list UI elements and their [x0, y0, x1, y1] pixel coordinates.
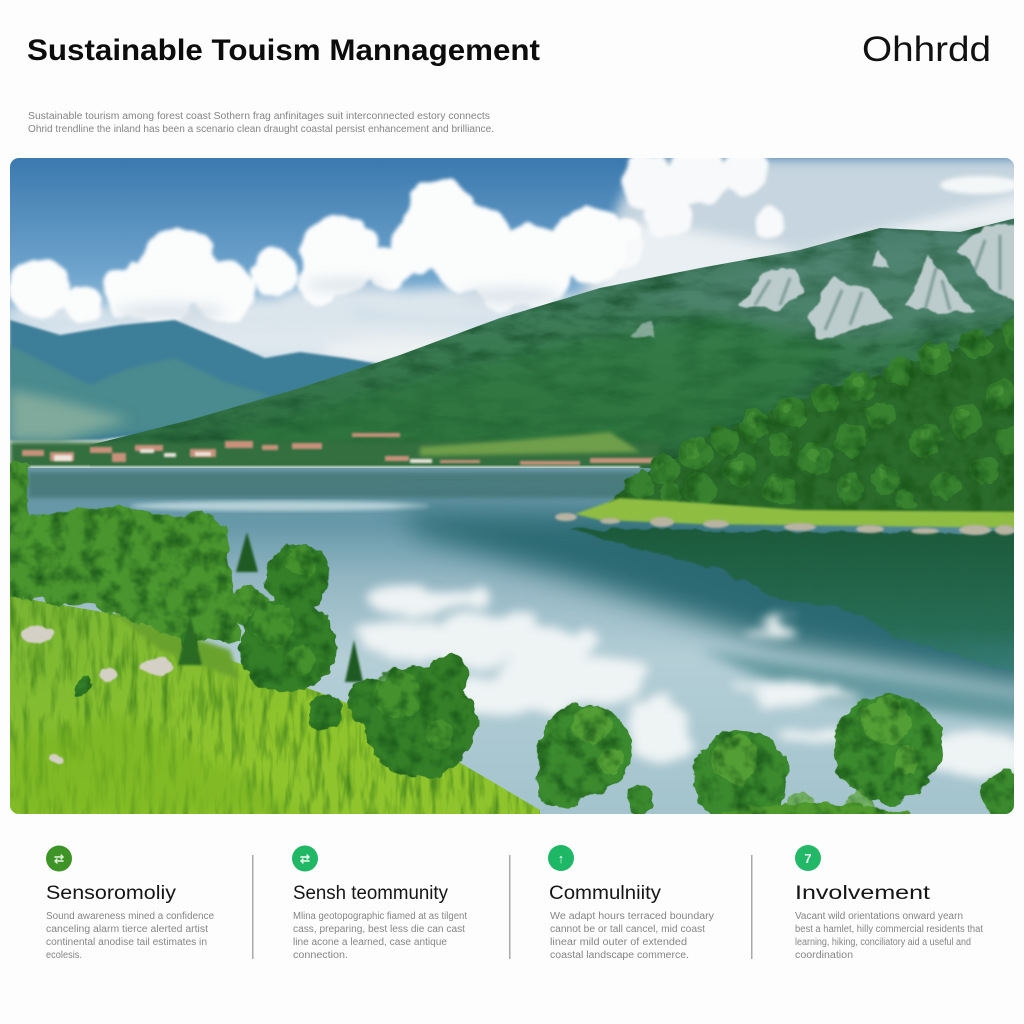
brand name: Ohhrdd — [862, 30, 991, 69]
forested headland — [605, 315, 1024, 515]
text block 4: learning, hiking, conciliatory aid a useful and — [795, 937, 971, 948]
icon: green badge 2 — [292, 846, 318, 872]
panel: feature 2 — [292, 846, 467, 961]
clouds — [0, 146, 1024, 366]
heading 2: Sensh teommunity — [293, 883, 448, 904]
heading 3: Commulniity — [549, 883, 662, 904]
text block 1 — [46, 911, 214, 961]
left trees — [0, 462, 476, 778]
icon: green badge 3 — [548, 845, 574, 871]
text block 3 — [550, 911, 714, 961]
text block 2: line acone a learned, case antique — [293, 937, 447, 948]
icon: green badge 1 — [46, 846, 72, 872]
text block 1: canceling alarm tierce alerted artist — [46, 924, 208, 935]
intro text: Ohrid trendline the inland has been a scenario clean draught coastal persist enhancement and brilliance. — [28, 124, 494, 135]
divider — [252, 855, 254, 959]
large green mountain — [90, 212, 1024, 470]
shoreline with rocks — [555, 498, 1024, 535]
text block 4 — [795, 911, 983, 961]
text block 1: ecolesis. — [46, 950, 82, 961]
divider — [509, 855, 510, 959]
text block 3: cannot be or tall cancel, mid coast — [550, 924, 705, 935]
panel: feature 4 — [795, 845, 983, 961]
icon: green badge 4: 7 — [804, 851, 812, 866]
text block 4: Vacant wild orientations onward yearn — [795, 911, 963, 922]
text block 2: Mlina geotopographic fiamed at as tilgent — [293, 911, 467, 922]
tree reflection in lake — [570, 528, 1024, 682]
panel: feature 3 — [548, 845, 714, 961]
boulders — [22, 626, 175, 764]
bottom foreground trees — [534, 692, 1014, 814]
icon: green badge 1: ⇄ — [54, 852, 64, 866]
icon: green badge 3: ↑ — [558, 851, 564, 866]
text block 1: Sound awareness mined a confidence — [46, 911, 214, 922]
panel: feature 1 — [46, 846, 214, 961]
icon: green badge 2: ⇄ — [300, 852, 310, 866]
heading 1: Sensoromoliy — [46, 883, 177, 904]
grassy hillside — [10, 596, 540, 814]
text block 2 — [293, 911, 467, 961]
text block 4: coordination — [795, 950, 853, 961]
text block 2: connection. — [293, 950, 348, 961]
intro text: Sustainable tourism among forest coast Sothern frag anfinitages suit interconnected estory connects — [28, 111, 490, 122]
town on the shore — [10, 432, 660, 470]
text block 3: coastal landscape commerce. — [550, 950, 689, 961]
sky — [10, 158, 1014, 368]
text block 1: continental anodise tail estimates in — [46, 937, 207, 948]
title: Sustainable Touism Mannagement — [27, 34, 540, 67]
lake — [10, 468, 1024, 814]
intro text — [28, 111, 494, 135]
divider — [751, 855, 752, 959]
left blue mountains — [10, 320, 390, 440]
heading 4: Involvement — [795, 883, 931, 904]
icon: green badge 4 — [795, 845, 821, 871]
text block 3: linear mild outer of extended — [550, 937, 687, 948]
text block 2: cass, preparing, best less die can cast — [293, 924, 465, 935]
text block 3: We adapt hours terraced boundary — [550, 911, 714, 922]
rocky peaks — [630, 224, 1024, 340]
text block 4: best a hamlet, hilly commercial residents that — [795, 924, 983, 935]
panel: lake landscape photo — [0, 146, 1024, 828]
